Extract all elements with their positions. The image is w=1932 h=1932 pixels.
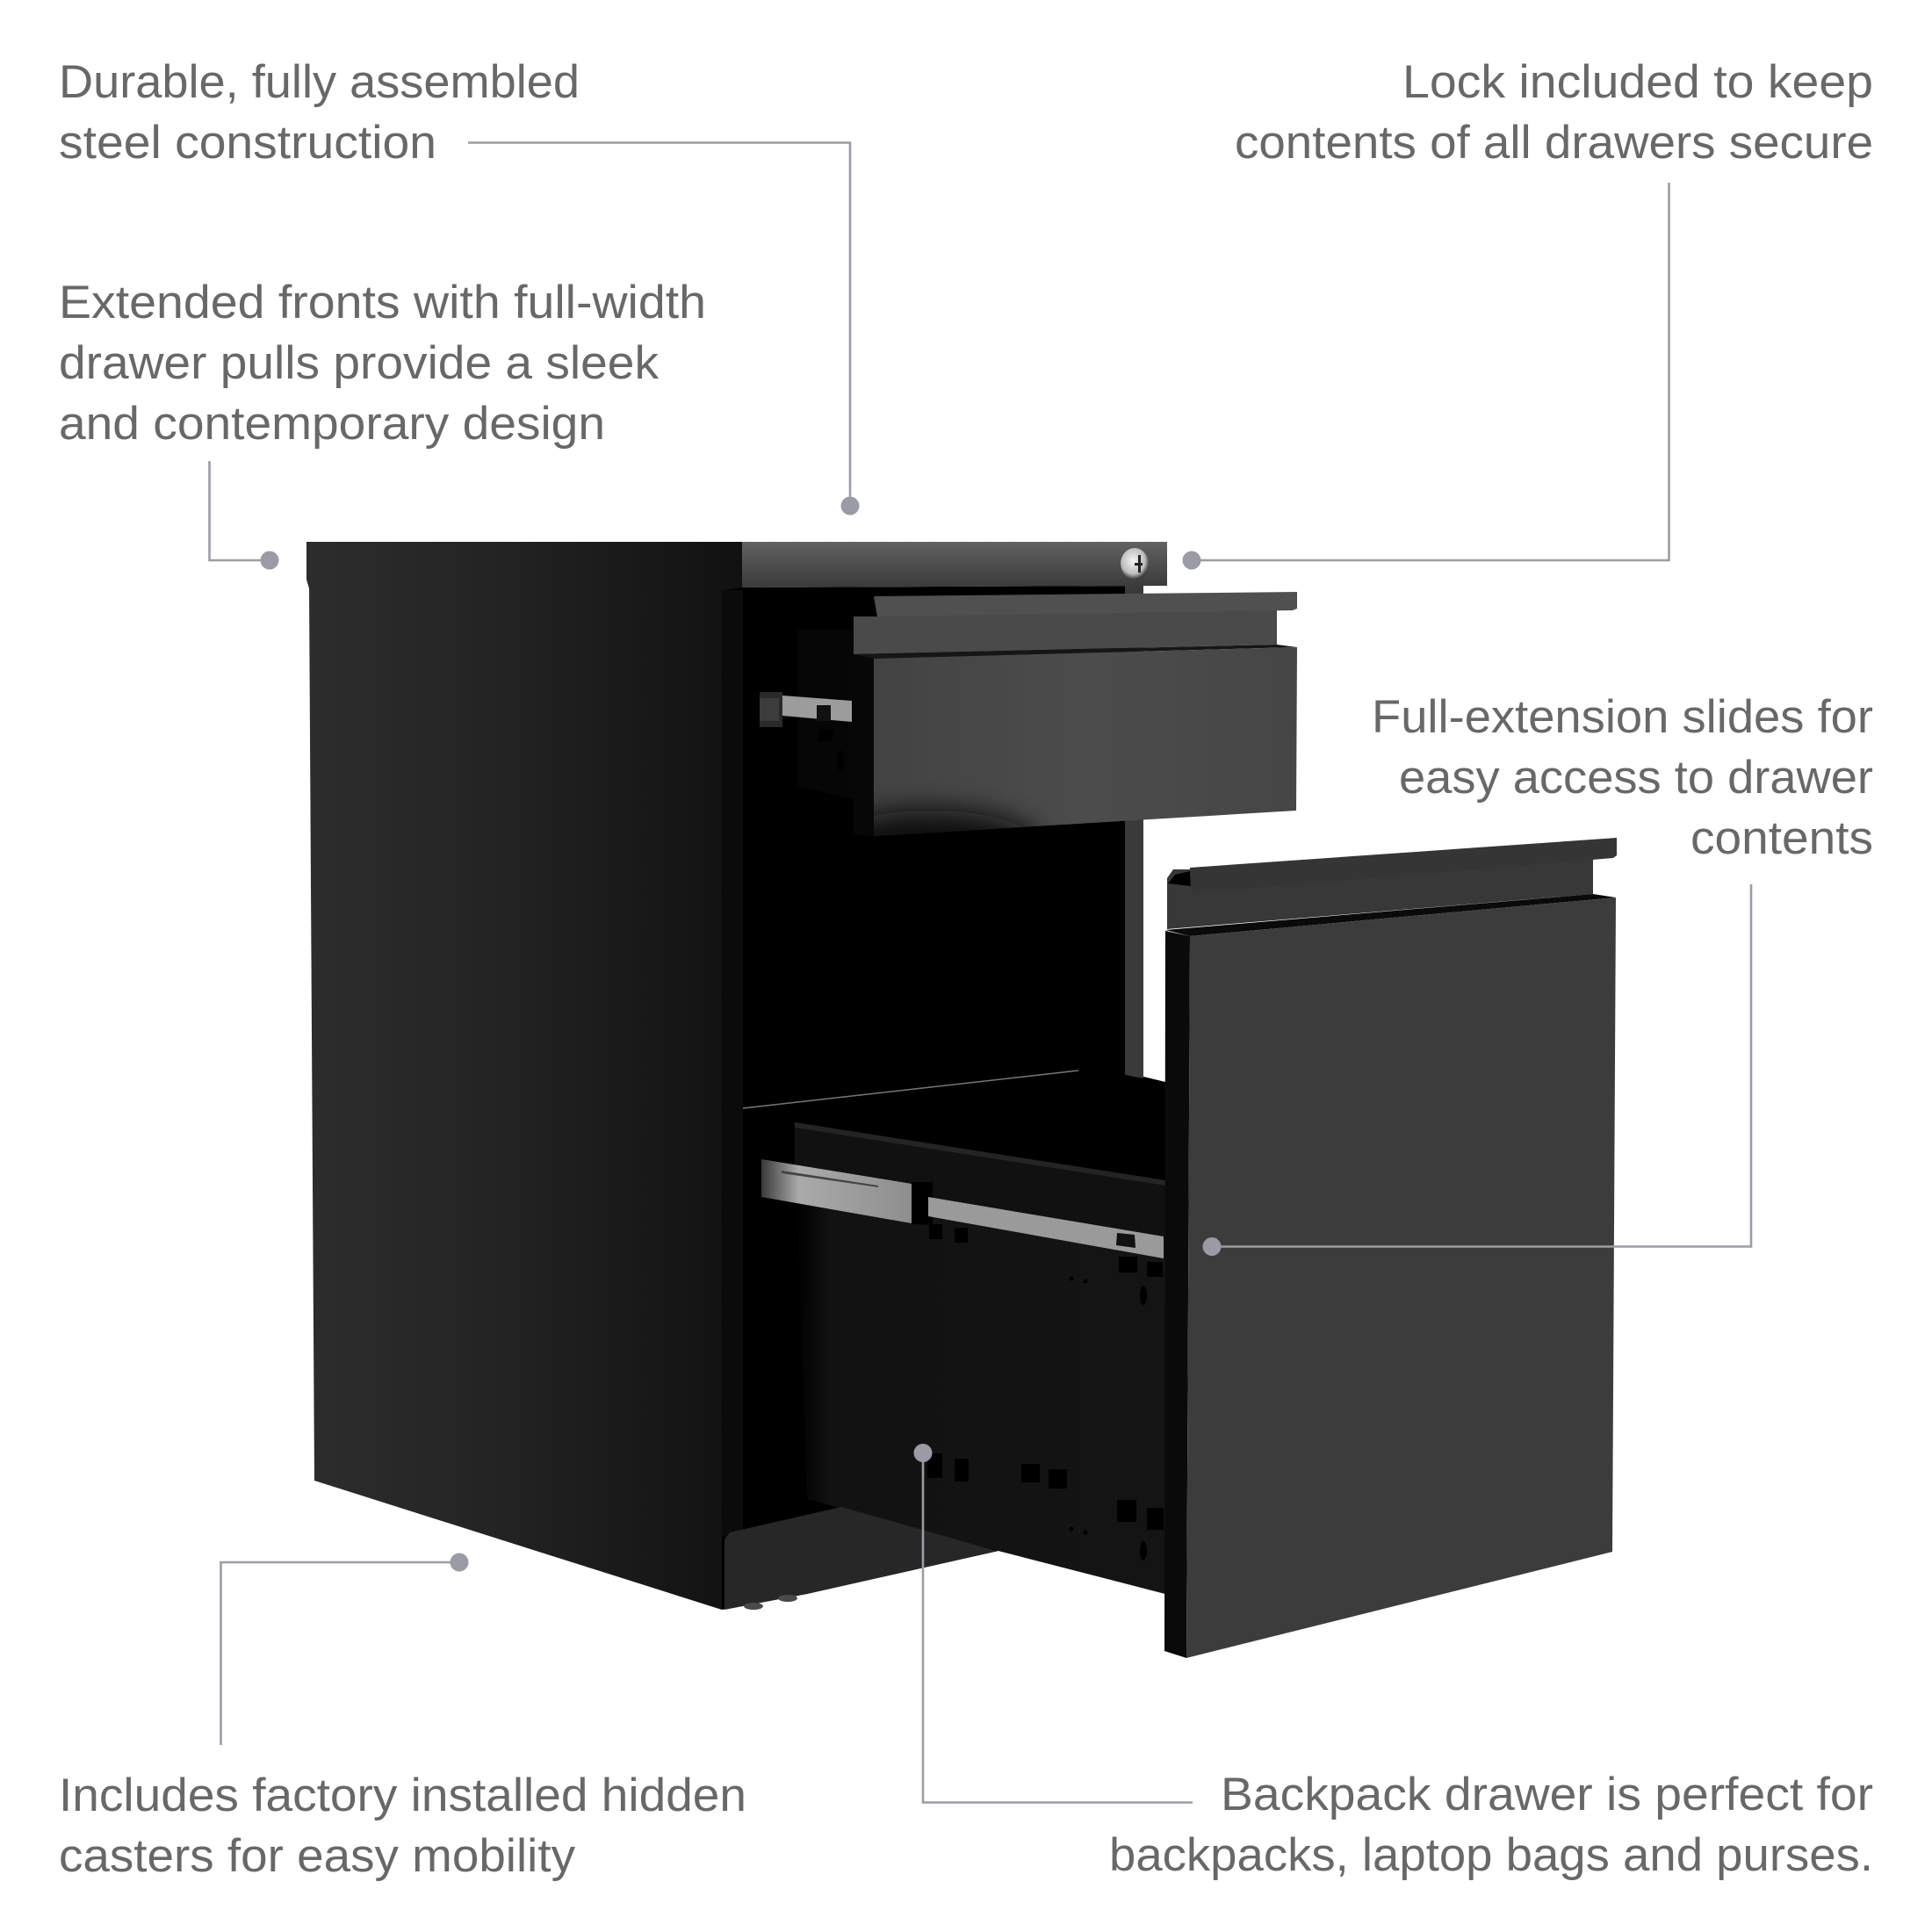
drawer side holes — [927, 1224, 1164, 1561]
leader line — [1212, 884, 1751, 1247]
floor edge line — [743, 1071, 1078, 1108]
callout text: backpacks, laptop bags and purses. — [1109, 1829, 1873, 1881]
slide window — [1116, 1233, 1135, 1248]
leader line — [923, 1453, 1193, 1802]
hidden casters — [744, 1595, 797, 1610]
upper drawer pull — [874, 592, 1297, 616]
callout text: casters for easy mobility — [59, 1830, 576, 1882]
upper drawer front edge — [854, 654, 874, 836]
lower drawer side — [795, 1142, 1165, 1594]
callout: drawer pulls — [59, 277, 706, 569]
lock — [1121, 548, 1149, 580]
lower drawer gap — [1165, 894, 1616, 936]
rear corner post — [1125, 586, 1143, 1078]
leader line — [221, 1562, 459, 1745]
lower drawer front — [1186, 898, 1616, 1658]
leader dot — [1203, 1237, 1221, 1256]
lower drawer slide rear — [761, 1159, 912, 1223]
callout: steel construction — [59, 56, 859, 515]
callout text: contents — [1690, 812, 1873, 864]
callout text: and contemporary design — [59, 398, 605, 450]
upper drawer top panel — [854, 602, 1277, 654]
callout: lock — [1182, 56, 1873, 569]
callout: backpack drawer — [913, 1444, 1873, 1881]
upper drawer front — [874, 647, 1297, 836]
lower drawer rim — [795, 1122, 1165, 1186]
cabinet interior — [722, 586, 1165, 1610]
callout text: Extended fronts with full-width — [59, 277, 706, 328]
top front band — [742, 542, 1167, 588]
callout: full-extension slides — [1203, 691, 1873, 1256]
base plate — [724, 1507, 997, 1610]
callout text: contents of all drawers secure — [1235, 117, 1873, 169]
leader dot — [841, 497, 859, 515]
upper drawer side — [797, 630, 854, 799]
leader line — [209, 461, 270, 560]
callout: casters — [59, 1553, 746, 1882]
leader line — [1192, 183, 1669, 560]
leader dot — [260, 551, 279, 569]
callout text: drawer pulls provide a sleek — [59, 337, 660, 389]
side panel — [306, 542, 742, 1610]
upper drawer shadow — [874, 795, 1043, 836]
callout text: Durable, fully assembled — [59, 56, 580, 108]
upper drawer gap — [854, 645, 1297, 659]
callout text: steel construction — [59, 117, 436, 169]
upper drawer pull hollow — [854, 596, 877, 616]
lower drawer top panel — [1167, 845, 1593, 929]
lower drawer pull hollow — [1168, 871, 1191, 886]
file cabinet illustration — [306, 542, 1617, 1658]
slide joint — [912, 1182, 933, 1225]
leader dot — [450, 1553, 469, 1572]
callout text: Lock included to keep — [1402, 56, 1873, 108]
upper drawer slide — [760, 692, 852, 771]
callout text: Backpack drawer is perfect for — [1221, 1769, 1873, 1820]
callout text: Includes factory installed hidden — [59, 1770, 746, 1821]
leader dot — [913, 1444, 933, 1462]
leader line — [468, 142, 850, 506]
callout text: easy access to drawer — [1399, 752, 1873, 804]
callout text: Full-extension slides for — [1372, 691, 1873, 743]
lower drawer pull — [1190, 838, 1617, 893]
lower drawer front edge — [1164, 931, 1190, 1658]
interior front strip — [722, 590, 743, 1537]
lower drawer upper side strip — [795, 1128, 1165, 1247]
slide rear groove — [782, 1171, 878, 1187]
leader dot — [1182, 551, 1201, 569]
lower drawer slide front — [928, 1197, 1164, 1258]
